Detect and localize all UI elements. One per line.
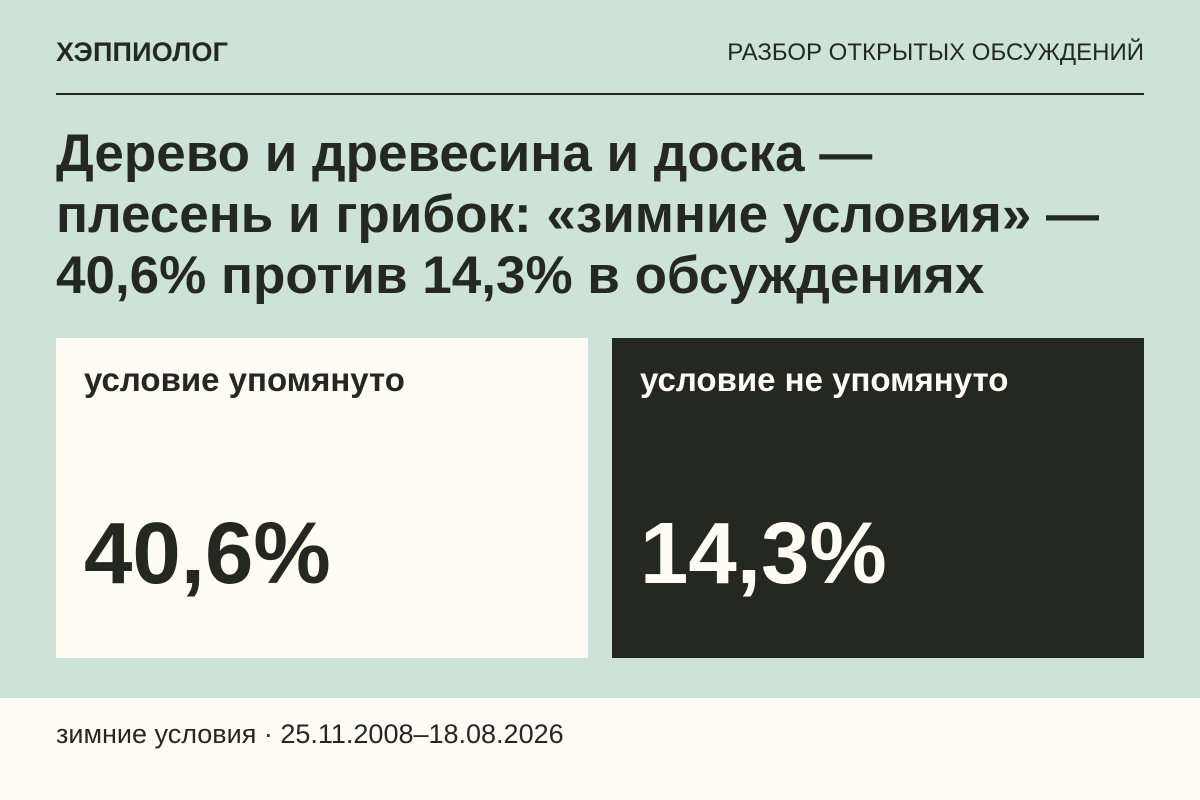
panel label: условие не упомянуто	[640, 361, 1008, 398]
panel value: 14,3%	[640, 505, 887, 602]
title: плесень и грибок: «зимние условия» —	[56, 185, 1099, 244]
title: 40,6% против 14,3% в обсуждениях	[56, 246, 984, 305]
header brand: ХЭППИОЛОГ	[56, 37, 228, 67]
panel value: 40,6%	[84, 505, 331, 602]
title: Дерево и древесина и доска —	[56, 124, 872, 183]
title	[56, 124, 1099, 305]
footer band	[0, 698, 1200, 800]
header subtitle: РАЗБОР ОТКРЫТЫХ ОБСУЖДЕНИЙ	[727, 39, 1144, 66]
footer text: зимние условия · 25.11.2008–18.08.2026	[56, 719, 564, 749]
panel label: условие упомянуто	[84, 361, 405, 398]
panel: condition mentioned	[56, 338, 588, 658]
panel: condition not mentioned	[612, 338, 1144, 658]
